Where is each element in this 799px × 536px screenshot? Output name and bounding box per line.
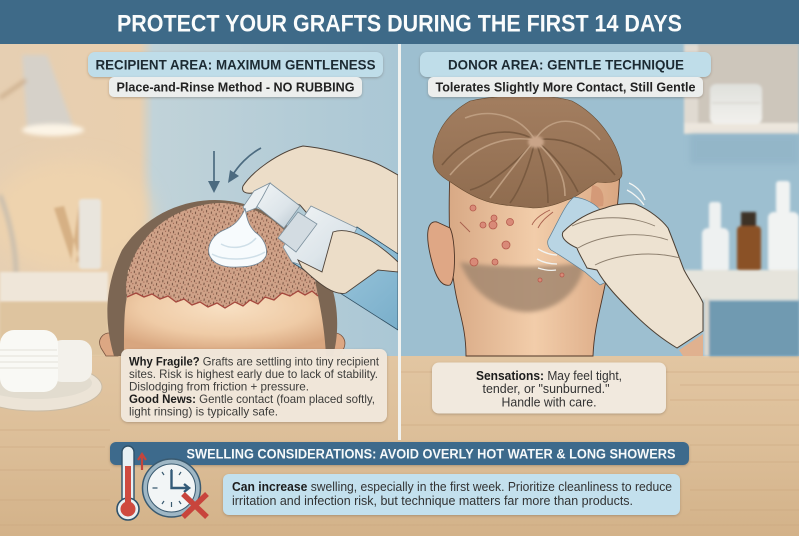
arrow curved <box>232 148 261 176</box>
callout: sensations <box>432 362 666 414</box>
panel: donor area scene <box>401 44 799 356</box>
heading: donor area: DONOR AREA: GENTLE TECHNIQUE <box>448 56 684 72</box>
hair <box>433 96 622 208</box>
recipient background wall <box>0 44 398 356</box>
hand: gloved <box>562 204 703 348</box>
bottle body <box>293 227 398 330</box>
callout: why fragile: sites. Risk is highest early due to lack of stability. <box>129 367 378 381</box>
ear <box>428 222 454 285</box>
banner: swelling considerations: SWELLING CONSIDERATIONS: AVOID OVERLY HOT WATER & LONG SHOWERS <box>186 446 676 462</box>
foam <box>209 208 267 267</box>
title banner: PROTECT YOUR GRAFTS DURING THE FIRST 14 DAYS <box>117 10 682 38</box>
counter <box>672 270 799 356</box>
callout: why fragile: light rinsing) is typically safe. <box>129 404 278 418</box>
donor background wall <box>401 44 799 356</box>
centre divider <box>398 44 401 440</box>
wrist skin <box>679 334 703 356</box>
side hair <box>107 200 337 356</box>
heading: recipient area <box>88 52 383 77</box>
hand: gloved <box>243 146 398 275</box>
motion lines <box>537 183 645 270</box>
subheading: recipient area: Place-and-Rinse Method - NO RUBBING <box>116 80 354 94</box>
grafted scalp <box>126 203 318 308</box>
arrows: placement direction <box>208 148 261 193</box>
far ear <box>590 185 604 208</box>
bottles <box>702 181 799 274</box>
foam bottle <box>243 183 398 330</box>
head: donor <box>428 96 622 356</box>
callout: swelling detail: irritation and infection risk, but technique matters far more than products. <box>232 494 633 508</box>
callout: why fragile: Good News: Gentle contact (foam placed softly, <box>129 392 375 406</box>
nape fade <box>460 262 584 312</box>
shelf counter <box>0 272 108 302</box>
collar <box>278 212 317 252</box>
title banner <box>0 0 799 44</box>
brushes and tube <box>54 199 101 269</box>
nozzle <box>243 183 270 212</box>
hair whorl <box>528 136 544 148</box>
head: recipient <box>100 200 345 356</box>
callout: why fragile: Dislodging from friction + pressure. <box>129 380 309 394</box>
cloth <box>548 197 632 285</box>
white bottle shoulder <box>283 206 357 275</box>
callout: sensations: tender, or "sunburned." <box>482 382 610 396</box>
finger detail <box>572 218 680 265</box>
subheading: donor area: Tolerates Slightly More Contact, Still Gentle <box>436 80 696 94</box>
heading: recipient area: RECIPIENT AREA: MAXIMUM GENTLENESS <box>96 56 376 72</box>
heading: donor area <box>420 52 711 77</box>
desk lamp <box>0 55 84 275</box>
callout: swelling detail: Can increase swelling, especially in the first week. Prioritize cleanliness to reduce <box>232 480 672 494</box>
icon: clock with cross <box>142 459 207 517</box>
callout: why fragile <box>121 349 387 422</box>
hair strands <box>442 114 615 203</box>
icon: thermometer <box>117 446 146 520</box>
wall shelf <box>684 44 799 134</box>
cotton pads and dish <box>0 330 102 411</box>
pump cylinder <box>254 183 300 228</box>
panel: recipient area scene <box>0 44 398 411</box>
callout: sensations: Handle with care. <box>502 396 596 410</box>
incision marks <box>470 205 564 282</box>
table surface <box>0 354 799 536</box>
callout: sensations: Sensations: May feel tight, <box>476 369 622 383</box>
hairline redness <box>127 291 318 308</box>
forehead <box>124 291 326 356</box>
callout: swelling detail <box>223 474 680 515</box>
warm lamp glow <box>0 160 150 270</box>
ears <box>100 333 345 356</box>
callout: why fragile: Why Fragile? Grafts are settling into tiny recipient <box>129 354 380 368</box>
lower fingers <box>298 231 398 293</box>
banner: swelling considerations <box>110 442 689 465</box>
neck and scalp <box>449 170 620 356</box>
shelf shadow <box>690 134 799 164</box>
arrow down <box>213 151 215 186</box>
